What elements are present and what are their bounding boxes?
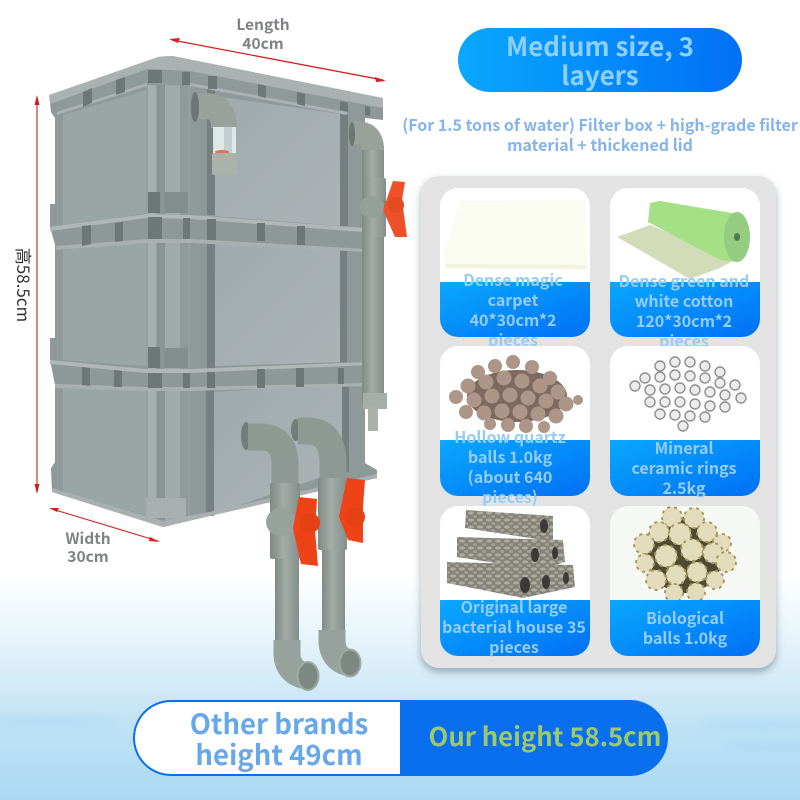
card: bacterial house <box>440 506 590 658</box>
title pill: Medium size, 3 <box>506 27 694 64</box>
dimension: height label: 高58.5cm <box>12 248 37 322</box>
bacterial house logs <box>447 510 575 598</box>
card: green and white cotton: white cotton <box>635 288 733 312</box>
card: dense magic carpet: 40*30cm*2 <box>470 307 556 331</box>
card: mineral ceramic rings <box>610 346 760 499</box>
under rim rib band <box>50 68 383 120</box>
top rim ribs <box>83 70 370 116</box>
card: bacterial house: pieces <box>489 634 539 658</box>
card: mineral ceramic rings: 2.5kg <box>662 475 706 499</box>
ceramic ring pile <box>630 357 746 431</box>
card: green and white cotton <box>610 188 760 352</box>
outlet pipe left <box>241 422 320 690</box>
our height segment <box>400 700 668 776</box>
comparison bar <box>133 700 668 776</box>
card: mineral ceramic rings: ceramic rings <box>631 455 737 479</box>
title pill <box>458 27 742 93</box>
card: hollow quartz balls: Hollow quartz <box>454 424 566 448</box>
card: dense magic carpet <box>440 188 590 351</box>
left side panels <box>63 90 147 515</box>
subtitle: (For 1.5 tons of water) Filter box + high-grade filter <box>402 112 798 136</box>
card: green and white cotton: pieces <box>659 328 709 352</box>
red valve handle <box>293 497 320 566</box>
card: bacterial house: Original large <box>461 594 567 618</box>
card: hollow quartz balls: (about 640 <box>468 464 552 488</box>
card: biological balls: balls 1.0kg <box>643 625 728 649</box>
box body <box>49 56 383 527</box>
sight tube pipe <box>191 92 237 175</box>
card: bacterial house: bacterial house 35 <box>442 614 586 638</box>
biological ball cluster <box>634 507 736 602</box>
dimension: height arrow <box>34 95 40 494</box>
dimension: width label: Width <box>65 527 111 549</box>
water ripples <box>0 718 800 748</box>
other brands segment: height 49cm <box>195 733 363 773</box>
lower stack band <box>50 360 367 391</box>
card: biological balls <box>610 506 760 656</box>
other brands segment: Other brands <box>190 702 368 742</box>
our height segment: Our height 58.5cm <box>429 717 661 754</box>
card: biological balls: Biological <box>646 605 724 629</box>
panel: filter materials <box>421 176 776 668</box>
other brands segment <box>133 700 401 776</box>
filter box product photo <box>49 56 407 690</box>
dimension: width label: 30cm <box>67 545 109 567</box>
card: hollow quartz balls: balls 1.0kg <box>468 444 553 468</box>
right side panels <box>214 96 342 514</box>
corner column <box>146 68 190 520</box>
dimension: length label: 40cm <box>242 32 284 54</box>
rim <box>49 56 383 108</box>
top stack band <box>50 214 367 252</box>
return pipe with valve <box>349 122 407 431</box>
card: dense magic carpet: Dense magic <box>463 267 563 291</box>
quartz ball pile <box>449 355 583 433</box>
card: mineral ceramic rings: Mineral <box>654 435 714 459</box>
card: green and white cotton: 120*30cm*2 <box>636 308 732 332</box>
card: green and white cotton: Dense green and <box>619 268 749 292</box>
base lip <box>52 474 377 527</box>
dimension: length arrow <box>169 38 386 82</box>
dimension: width arrow <box>49 508 160 542</box>
card: hollow quartz balls <box>440 346 590 508</box>
stack bumps <box>50 204 57 362</box>
dimension: length label: Length <box>236 13 290 35</box>
red valve handle <box>339 478 365 543</box>
card: dense magic carpet: pieces <box>488 327 538 351</box>
subtitle: material + thickened lid <box>507 132 693 156</box>
title pill: layers <box>561 56 639 93</box>
card: dense magic carpet: carpet <box>488 287 539 311</box>
card: hollow quartz balls: pieces) <box>482 484 538 508</box>
outlet pipe right <box>291 419 365 676</box>
red valve handle <box>383 181 407 237</box>
